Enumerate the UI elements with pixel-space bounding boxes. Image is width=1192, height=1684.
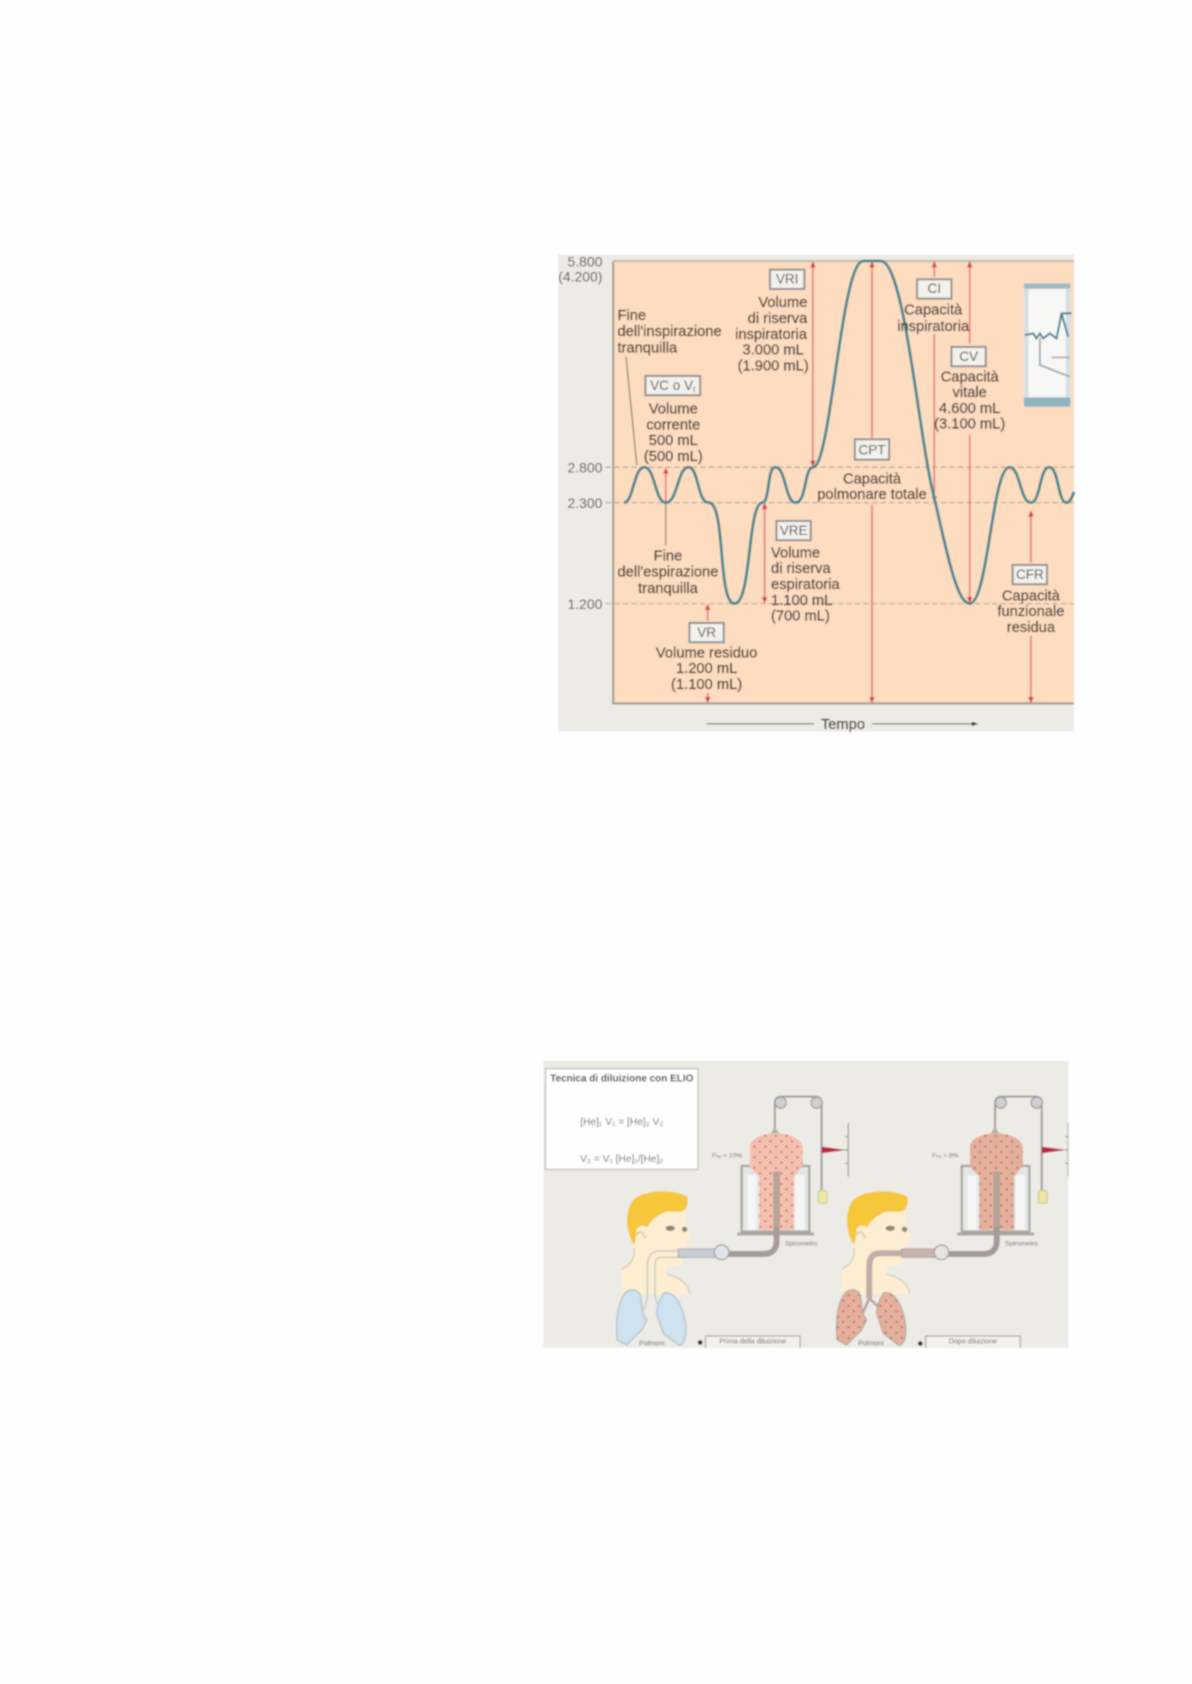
label: total lung capacity: Capacità [843, 471, 901, 487]
panel: lung volumes chart [558, 253, 1074, 733]
caption: before dilution: Polmoni [639, 1340, 665, 1348]
formula box: V₂ = V₁ [He]₁/[He]₂ [580, 1154, 663, 1165]
label: inspiratory reserve volume: Volume [758, 295, 807, 311]
label: inspiratory reserve volume: VRI [776, 272, 798, 287]
label: end of quiet expiration: tranquilla [638, 581, 699, 597]
label: expiratory reserve volume [771, 521, 841, 625]
label: inspiratory capacity: inspiratoria [897, 319, 970, 335]
label: functional residual capacity: residua [1007, 620, 1056, 636]
label: tidal volume: Volume [649, 402, 698, 418]
label: inspiratory reserve volume: di riserva [748, 311, 808, 327]
label: inspiratory reserve volume: 3.000 mL [743, 343, 804, 359]
label: total lung capacity: polmonare totale [817, 487, 927, 503]
plot area [613, 261, 1074, 703]
spirometer: before dilution: Fₕₑ = 10% [712, 1152, 742, 1159]
label: end of quiet inspiration: Fine [617, 308, 646, 324]
icon: spirometer drum [1024, 283, 1072, 407]
label: expiratory reserve volume: (700 mL) [771, 609, 830, 625]
time axis [707, 717, 978, 733]
label: end of quiet expiration: Fine [654, 549, 682, 565]
y axis labels [558, 253, 603, 612]
label: residual volume: (1.100 mL) [671, 677, 742, 693]
red volume arrows [663, 261, 1034, 703]
y axis labels: 2.800 [568, 460, 603, 476]
label: vital capacity: 4.600 mL [939, 401, 1000, 417]
label: functional residual capacity: funzionale [997, 604, 1064, 620]
spirometer: before dilution [712, 1097, 848, 1254]
label: expiratory reserve volume: 1.100 mL [771, 593, 832, 609]
label: expiratory reserve volume: VRE [780, 523, 807, 538]
label: tidal volume: 500 mL [649, 433, 698, 449]
formula box: Tecnica di diluizione con ELIO [550, 1073, 694, 1084]
label: vital capacity: vitale [953, 385, 987, 401]
caption: after dilution: Polmoni [858, 1340, 884, 1348]
label: inspiratory reserve volume [735, 270, 809, 374]
y axis labels: (4.200) [558, 268, 602, 284]
label: end of quiet inspiration: tranquilla [617, 340, 678, 356]
label: functional residual capacity [997, 565, 1064, 636]
label: functional residual capacity: CFR [1016, 567, 1044, 582]
label: tidal volume: VC o V [650, 378, 693, 393]
label: vital capacity: CV [959, 349, 978, 364]
y axis labels: 5.800 [568, 253, 603, 269]
label: inspiratory capacity: CI [928, 281, 941, 296]
label: expiratory reserve volume: espiratoria [771, 577, 841, 593]
leader lines [626, 357, 666, 546]
panel: helium dilution technique [543, 1061, 1069, 1350]
label: end of quiet expiration: dell'espirazione [618, 565, 718, 581]
spirometer: after dilution [932, 1097, 1068, 1254]
caption: before dilution: Prima della diluizione [719, 1337, 786, 1345]
caption: after dilution [858, 1336, 1020, 1350]
volume curve [624, 261, 1074, 604]
breathing tube: after dilution [902, 1245, 949, 1260]
label: inspiratory reserve volume: inspiratoria [735, 327, 808, 343]
label: total lung capacity: CPT [858, 442, 886, 457]
label: functional residual capacity: Capacità [1002, 588, 1060, 604]
label: expiratory reserve volume: Volume [771, 545, 820, 561]
time axis: Tempo [821, 717, 865, 733]
label: tidal volume [644, 376, 703, 465]
label: inspiratory capacity: Capacità [904, 303, 962, 319]
spirometer: before dilution: Spirometro [785, 1241, 818, 1248]
label: inspiratory reserve volume: (1.900 mL) [738, 358, 809, 374]
label: residual volume [656, 623, 757, 693]
diagram contents [546, 1069, 1068, 1350]
person with filled lungs [836, 1191, 912, 1345]
label: tidal volume: t [693, 384, 696, 394]
label: total lung capacity [817, 439, 927, 503]
volume reference lines [606, 467, 1074, 604]
formula box: [He]₁ V₁ = [He]₂ V₂ [580, 1117, 663, 1128]
diagram background [543, 1061, 1069, 1348]
label: vital capacity [934, 347, 1005, 433]
plot axes [613, 261, 1074, 703]
label: vital capacity: Capacità [941, 369, 999, 385]
y axis labels: 1.200 [568, 596, 603, 612]
spirometer: after dilution: Spirometro [1005, 1241, 1038, 1248]
label: tidal volume: corrente [646, 417, 700, 433]
label: residual volume: Volume residuo [656, 645, 757, 661]
label: inspiratory capacity [897, 279, 970, 335]
y axis labels: 2.300 [568, 495, 603, 511]
label: end of quiet inspiration: dell'inspirazione [617, 324, 722, 340]
person with clear lungs [617, 1191, 692, 1345]
label: residual volume: 1.200 mL [676, 661, 737, 677]
caption: before dilution [639, 1336, 800, 1350]
caption: after dilution: Dopo diluizione [949, 1337, 997, 1345]
chart background [558, 255, 1074, 731]
label: residual volume: VR [697, 625, 716, 640]
breathing tube: before dilution [678, 1245, 729, 1260]
label: tidal volume: (500 mL) [644, 449, 703, 465]
spirometer: after dilution: Fₕₑ = 8% [932, 1152, 959, 1159]
label: expiratory reserve volume: di riserva [771, 561, 832, 577]
label: vital capacity: (3.100 mL) [934, 417, 1005, 433]
formula box [546, 1069, 698, 1170]
